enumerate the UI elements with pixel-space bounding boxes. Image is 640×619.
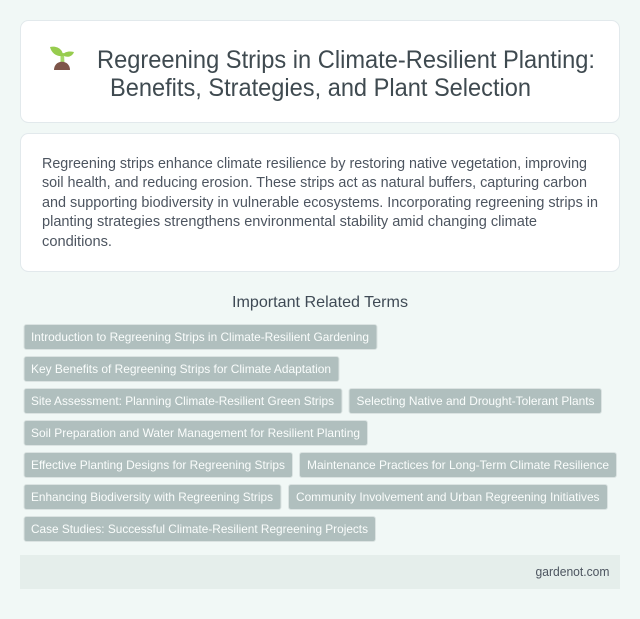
- chip: maintenance: [300, 452, 616, 478]
- chip: introduction: [24, 324, 377, 350]
- chip: introduction: Introduction to Regreening Strips in Climate-Resilient Gardening: [31, 330, 369, 344]
- title: [97, 46, 595, 102]
- chip: site assessment: Site Assessment: Planning Climate-Resilient Green Strips: [31, 394, 334, 408]
- intro paragraph: planting strategies strengthens environmental stability amid changing climate: [42, 214, 537, 230]
- chip: biodiversity: [24, 484, 281, 510]
- chip: maintenance: Maintenance Practices for Long-Term Climate Resilience: [307, 458, 609, 472]
- intro paragraph: conditions.: [42, 234, 112, 250]
- title: Regreening Strips in Climate-Resilient Planting:: [97, 46, 595, 74]
- title: Benefits, Strategies, and Plant Selection: [110, 74, 531, 102]
- chip: site assessment: [24, 388, 342, 414]
- chip: key benefits: [24, 356, 339, 382]
- intro paragraph: soil health, and reducing erosion. These strips act as natural buffers, capturing carbon: [42, 175, 587, 191]
- chip: case studies: Case Studies: Successful Climate-Resilient Regreening Projects: [31, 522, 368, 536]
- chip: selecting native plants: Selecting Native and Drought-Tolerant Plants: [356, 394, 594, 408]
- chip: planting designs: Effective Planting Designs for Regreening Strips: [31, 458, 285, 472]
- heading: important related terms: Important Related Terms: [232, 294, 408, 311]
- chip: biodiversity: Enhancing Biodiversity with Regreening Strips: [31, 490, 273, 504]
- panel: title card: [20, 20, 620, 122]
- panel: intro text card: [20, 134, 620, 272]
- chip: community involvement: [288, 484, 608, 510]
- footer bar: [20, 555, 620, 589]
- chip: selecting native plants: [349, 388, 602, 414]
- footer source: gardenot.com: [536, 565, 610, 579]
- intro paragraph: Regreening strips enhance climate resilience by restoring native vegetation, improving: [42, 156, 587, 172]
- icon: seedling: [50, 47, 74, 70]
- chip: soil preparation: Soil Preparation and Water Management for Resilient Planting: [31, 426, 360, 440]
- chip: case studies: [24, 516, 376, 542]
- intro paragraph: [42, 156, 598, 250]
- chip: soil preparation: [24, 420, 368, 446]
- intro paragraph: and supporting biodiversity in vulnerable ecosystems. Incorporating regreening strips in: [42, 195, 598, 211]
- chip: key benefits: Key Benefits of Regreening Strips for Climate Adaptation: [31, 362, 331, 376]
- chip: community involvement: Community Involvement and Urban Regreening Initiatives: [296, 490, 600, 504]
- chip: planting designs: [24, 452, 292, 478]
